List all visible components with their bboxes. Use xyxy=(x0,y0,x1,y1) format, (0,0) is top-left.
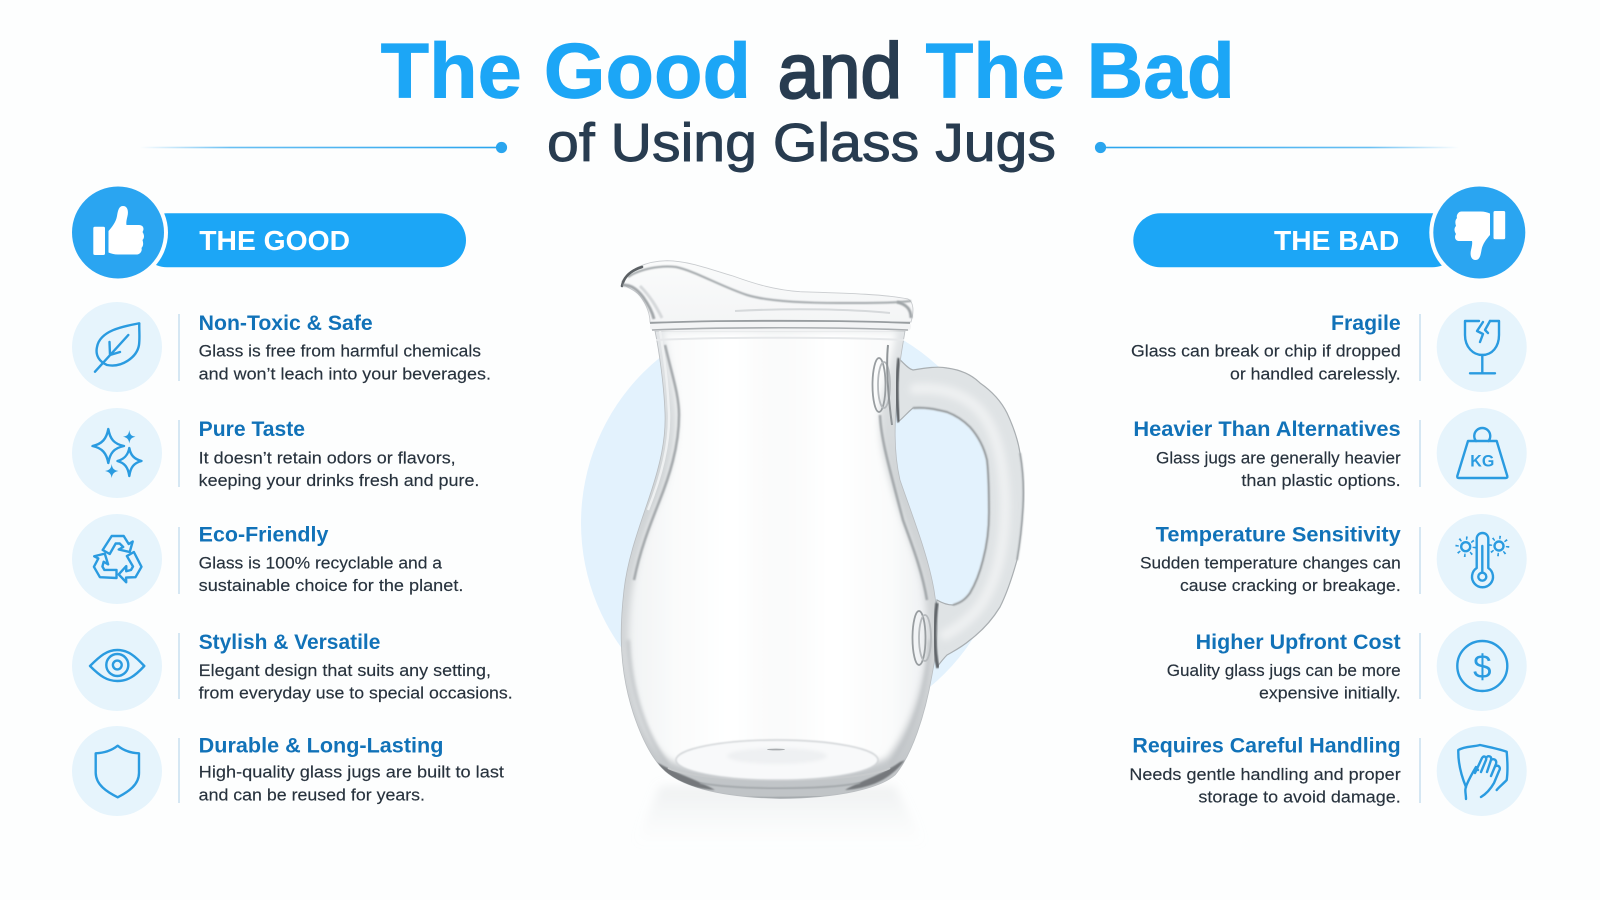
text: Pure Taste: keeping your drinks fresh and pure. xyxy=(199,471,479,490)
icon: kg weight: KG xyxy=(1470,452,1494,471)
jug rim and spout xyxy=(622,261,913,340)
header: the good: THE GOOD xyxy=(199,225,350,256)
text: Fragile: Glass can break or chip if dropped xyxy=(1131,342,1401,361)
jug reflection xyxy=(635,786,925,845)
icon: thermometer xyxy=(1437,514,1527,604)
text: Eco-Friendly: Eco-Friendly xyxy=(199,524,329,547)
jug handle joints xyxy=(872,345,938,668)
text: Durable & Long-Lasting: High-quality glass jugs are built to last xyxy=(199,763,504,782)
text: Pure Taste: Pure Taste xyxy=(199,418,305,441)
text: Requires Careful Handling xyxy=(1129,735,1401,807)
text: Fragile: Fragile xyxy=(1331,312,1401,335)
text: Higher Upfront Cost: expensive initially. xyxy=(1259,683,1401,702)
icon: thumbs down xyxy=(1454,211,1505,260)
icon: sparkles xyxy=(72,408,162,498)
text: Heavier Than Alternatives xyxy=(1133,418,1401,490)
text: Requires Careful Handling: Requires Careful Handling xyxy=(1132,735,1401,758)
text: Non-Toxic & Safe: and won’t leach into your beverages. xyxy=(199,364,491,383)
item: Requires Careful Handling xyxy=(1129,726,1527,816)
text: Non-Toxic & Safe xyxy=(199,312,491,383)
jug base crescents xyxy=(655,762,715,790)
icon: hand with cloth xyxy=(1437,726,1527,816)
text: Temperature Sensitivity: Temperature Sensitivity xyxy=(1156,524,1401,547)
text: Non-Toxic & Safe: Glass is free from harmful chemicals xyxy=(199,342,481,361)
icon: dollar xyxy=(1437,621,1527,711)
title: and xyxy=(778,26,902,114)
subtitle rule left xyxy=(140,142,507,153)
item: Stylish & Versatile xyxy=(72,621,513,711)
text: Durable & Long-Lasting xyxy=(199,734,504,804)
text: Durable & Long-Lasting: Durable & Long-Lasting xyxy=(199,734,443,757)
jug body xyxy=(621,331,937,798)
icon: broken glass xyxy=(1437,302,1527,392)
item: Eco-Friendly xyxy=(72,514,463,604)
text: Stylish & Versatile: from everyday use to special occasions. xyxy=(199,683,513,702)
background circle behind jug xyxy=(581,310,1007,736)
icon: recycle xyxy=(72,514,162,604)
text: Pure Taste xyxy=(199,418,479,490)
icon: eye xyxy=(72,621,162,711)
text: Eco-Friendly: Glass is 100% recyclable and a xyxy=(199,553,443,572)
icon: thumbs up xyxy=(93,206,144,255)
text: Heavier Than Alternatives: Glass jugs are generally heavier xyxy=(1156,448,1401,467)
icon: leaf xyxy=(72,302,162,392)
item: Durable & Long-Lasting xyxy=(72,726,504,816)
header: the good xyxy=(68,182,466,282)
item: Higher Upfront Cost xyxy=(1167,621,1527,711)
text: Fragile xyxy=(1131,312,1401,383)
title: The Good xyxy=(381,26,751,114)
item: Fragile xyxy=(1131,302,1527,392)
text: Temperature Sensitivity: Sudden temperature changes can xyxy=(1140,553,1401,572)
text: Pure Taste: It doesn’t retain odors or flavors, xyxy=(199,448,456,467)
jug wall shading xyxy=(634,345,679,580)
icon: dollar: $ xyxy=(1473,648,1491,685)
item: Temperature Sensitivity xyxy=(1140,514,1527,604)
text: Heavier Than Alternatives: Heavier Than Alternatives xyxy=(1133,418,1401,441)
text: Fragile: or handled carelessly. xyxy=(1230,364,1401,383)
text: Requires Careful Handling: storage to avoid damage. xyxy=(1198,788,1401,807)
text: Requires Careful Handling: Needs gentle handling and proper xyxy=(1129,765,1401,784)
text: Heavier Than Alternatives: than plastic options. xyxy=(1241,471,1401,490)
text: Stylish & Versatile xyxy=(199,631,513,702)
panel: the good xyxy=(72,302,513,816)
text: Higher Upfront Cost xyxy=(1167,631,1401,702)
text: Non-Toxic & Safe: Non-Toxic & Safe xyxy=(199,312,373,335)
text: Eco-Friendly xyxy=(199,524,463,595)
glass jug xyxy=(621,261,1023,845)
text: Durable & Long-Lasting: and can be reused for years. xyxy=(199,785,425,804)
text: Temperature Sensitivity: cause cracking or breakage. xyxy=(1180,576,1401,595)
subtitle: of Using Glass Jugs xyxy=(547,113,1056,173)
text: Stylish & Versatile: Stylish & Versatile xyxy=(199,631,380,654)
text: Higher Upfront Cost: Guality glass jugs can be more xyxy=(1167,661,1401,680)
title xyxy=(381,26,1235,114)
icon: kg weight xyxy=(1437,408,1527,498)
header: the bad xyxy=(1133,182,1529,282)
text: Higher Upfront Cost: Higher Upfront Cost xyxy=(1196,631,1401,654)
text: Eco-Friendly: sustainable choice for the planet. xyxy=(199,576,463,595)
text: Stylish & Versatile: Elegant design that suits any setting, xyxy=(199,661,491,680)
item: Non-Toxic & Safe xyxy=(72,302,491,392)
infographic canvas xyxy=(72,40,1526,816)
item: Pure Taste xyxy=(72,408,479,498)
jug handle xyxy=(898,358,1023,667)
title: The Bad xyxy=(926,26,1235,114)
panel: the bad xyxy=(1129,302,1527,816)
jug base xyxy=(676,740,878,780)
item: Heavier Than Alternatives xyxy=(1133,408,1527,498)
subtitle rule right xyxy=(1095,142,1459,153)
header: the bad: THE BAD xyxy=(1274,225,1399,256)
text: Temperature Sensitivity xyxy=(1140,524,1401,595)
icon: shield xyxy=(72,726,162,816)
